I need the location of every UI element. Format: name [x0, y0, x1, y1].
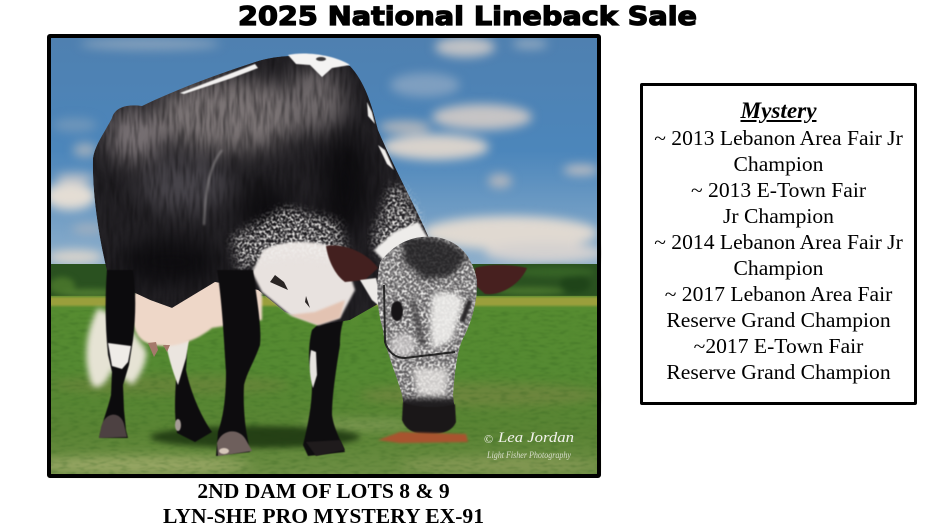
photo: Lyn-She Pro Mystery grazing in a field: [47, 34, 602, 479]
watermark: Light Fisher Photography: [486, 450, 571, 460]
achievements list: Champion: [734, 152, 823, 176]
halter: [384, 285, 455, 358]
neck roan: [372, 185, 428, 262]
watermark: ©: [484, 432, 493, 446]
shadow under cow: [150, 426, 360, 448]
panel: Mystery achievements: [640, 83, 917, 405]
sky: [49, 36, 599, 266]
tail switch: [86, 308, 146, 387]
far front hoof: [306, 440, 345, 456]
photo caption: [163, 479, 484, 528]
photo caption: 2ND DAM OF LOTS 8 & 9: [197, 479, 450, 503]
head: [377, 236, 478, 408]
far front leg: [303, 300, 352, 456]
clouds: [44, 37, 605, 264]
achievements list: ~ 2014 Lebanon Area Fair Jr: [654, 230, 903, 254]
near hind leg: [99, 270, 135, 438]
feed pad: [378, 432, 468, 443]
achievements list: Jr Champion: [723, 204, 834, 228]
achievements list: ~ 2013 Lebanon Area Fair Jr: [654, 126, 903, 150]
achievements list: Reserve Grand Champion: [666, 360, 891, 384]
photo frame: [49, 36, 599, 476]
near front leg: [216, 270, 260, 456]
far ear: [475, 265, 527, 294]
achievements list: ~ 2013 E-Town Fair: [691, 178, 866, 202]
achievements list: ~ 2017 Lebanon Area Fair: [665, 282, 892, 306]
watermark: Lea Jordan: [497, 430, 574, 446]
teats: [148, 342, 170, 357]
shoulder and chest white: [232, 208, 355, 325]
muzzle: [402, 402, 456, 434]
treeline: [49, 264, 599, 298]
yellow meadow band: [49, 297, 599, 306]
udder: [132, 280, 262, 346]
title: 2025 National Lineback Sale: [238, 2, 697, 32]
neck white patch behind ear: [360, 278, 384, 310]
far hind leg: [165, 340, 212, 442]
grass field: [49, 296, 599, 477]
body: [93, 56, 430, 325]
achievements list: ~2017 E-Town Fair: [694, 334, 863, 358]
achievements list: [654, 126, 903, 384]
achievements list: Champion: [734, 256, 823, 280]
grass texture: [30, 310, 600, 477]
photo caption: LYN-SHE PRO MYSTERY EX-91: [163, 504, 484, 528]
hind thigh crease: [204, 150, 222, 225]
white topline markings: [180, 53, 394, 170]
panel heading: Mystery: [740, 98, 816, 124]
near ear: [326, 245, 378, 282]
achievements list: Reserve Grand Champion: [666, 308, 891, 332]
watermark: [484, 430, 574, 460]
